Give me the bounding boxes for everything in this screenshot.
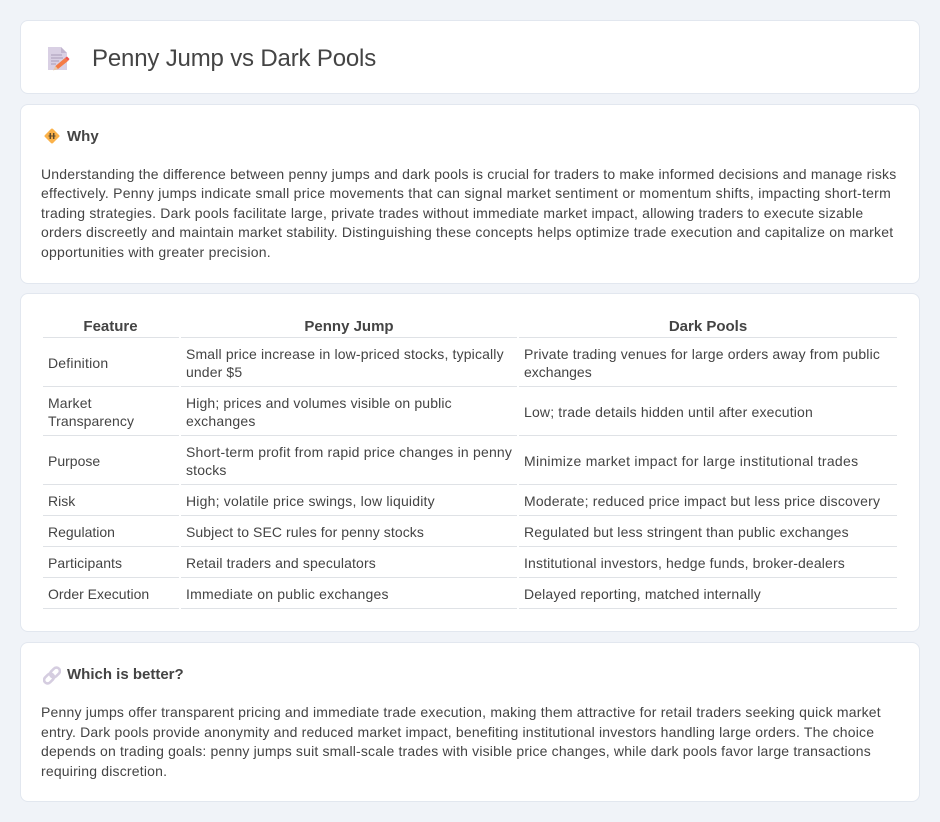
heading: which is better: Which is better? xyxy=(67,666,184,683)
panel: why xyxy=(20,104,920,284)
text block: which is better: Penny jumps offer transparent pricing and immediate trade execution, making them attractive for retail traders seeking quick market xyxy=(41,704,881,720)
text block: which is better: entry. Dark pools provide anonymity and reduced market impact, benefiting institutional investors handling large orders. The choice xyxy=(41,724,874,740)
icon: chain link xyxy=(43,666,61,685)
cell: transparency penny jump: exchanges xyxy=(186,413,256,429)
cell: regulation penny jump: Subject to SEC rules for penny stocks xyxy=(186,524,424,540)
cell: definition penny jump: Small price increase in low-priced stocks, typically xyxy=(186,346,504,362)
table header: dark pools: Dark Pools xyxy=(669,318,747,335)
cell: risk dark pools: Moderate; reduced price impact but less price discovery xyxy=(524,493,880,509)
text block: which is better: requiring discretion. xyxy=(41,763,167,779)
cell: execution dark pools: Delayed reporting, matched internally xyxy=(524,586,761,602)
cell: transparency dark pools: Low; trade details hidden until after execution xyxy=(524,404,813,420)
row: risk: Risk xyxy=(48,493,75,509)
text block: why: trading strategies. Dark pools facilitate large, private trades without immediate market impact, allowing traders to execute sizable xyxy=(41,205,863,221)
cell: transparency penny jump: High; prices and volumes visible on public xyxy=(186,395,452,411)
cell: definition penny jump: under $5 xyxy=(186,364,242,380)
cell: purpose penny jump: stocks xyxy=(186,462,227,478)
row: order execution: Order Execution xyxy=(48,586,149,602)
row: market transparency xyxy=(48,395,134,429)
cell: definition dark pools xyxy=(524,346,880,380)
text block: which is better: depends on trading goals: penny jumps suit small-scale trades with visible price changes, while dark pools favor large transactions xyxy=(41,743,871,759)
cell: execution penny jump: Immediate on public exchanges xyxy=(186,586,389,602)
row: market transparency: Market xyxy=(48,395,92,411)
panel: which is better xyxy=(20,642,920,802)
text block: why: opportunities with greater precision. xyxy=(41,244,271,260)
text block: which is better xyxy=(41,704,881,779)
row: definition: Definition xyxy=(48,355,108,371)
table header: feature: Feature xyxy=(83,318,138,335)
text block: why: effectively. Penny jumps indicate small price movements that can signal market sentiment or momentum shifts, impacting short-term xyxy=(41,185,891,201)
cell: purpose dark pools: Minimize market impact for large institutional trades xyxy=(524,453,858,469)
cell: regulation dark pools: Regulated but less stringent than public exchanges xyxy=(524,524,849,540)
panel: comparison table xyxy=(20,293,920,632)
text block: why xyxy=(41,166,896,260)
cell: definition dark pools: Private trading venues for large orders away from public xyxy=(524,346,880,362)
cell: participants dark pools: Institutional investors, hedge funds, broker-dealers xyxy=(524,555,845,571)
heading: why: Why xyxy=(67,128,99,145)
table header: penny jump: Penny Jump xyxy=(304,318,394,335)
cell: definition dark pools: exchanges xyxy=(524,364,592,380)
row: purpose: Purpose xyxy=(48,453,100,469)
panel: header xyxy=(20,20,920,94)
row: participants: Participants xyxy=(48,555,122,571)
title: Penny Jump vs Dark Pools xyxy=(92,45,376,72)
cell: purpose penny jump: Short-term profit from rapid price changes in penny xyxy=(186,444,512,460)
cell: participants penny jump: Retail traders and speculators xyxy=(186,555,376,571)
cell: risk penny jump: High; volatile price swings, low liquidity xyxy=(186,493,435,509)
row: regulation: Regulation xyxy=(48,524,115,540)
cell: definition penny jump xyxy=(186,346,504,380)
row: market transparency: Transparency xyxy=(48,413,134,429)
cell: purpose penny jump xyxy=(186,444,512,478)
cell: transparency penny jump xyxy=(186,395,452,429)
icon: diamond sign xyxy=(44,128,60,144)
text block: why: Understanding the difference between penny jumps and dark pools is crucial for traders to make informed decisions and manage risks xyxy=(41,166,896,182)
text block: why: orders discreetly and maintain market stability. Distinguishing these concepts helps optimize trade execution and capitalize on market xyxy=(41,224,893,240)
icon: document with pencil xyxy=(48,47,70,70)
